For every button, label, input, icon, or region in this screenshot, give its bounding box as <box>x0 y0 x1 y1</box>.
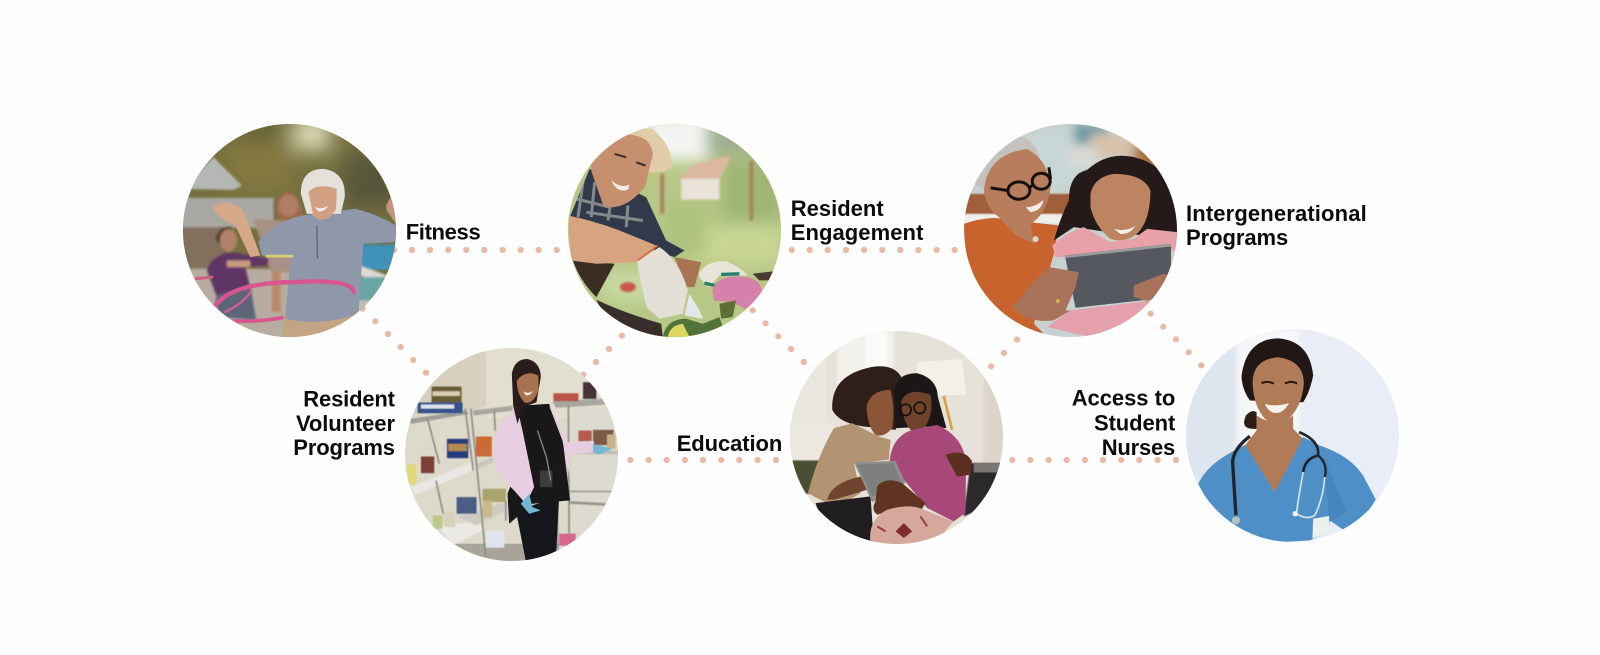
planter and flowers <box>596 270 780 336</box>
hands <box>1012 267 1172 320</box>
label: access to student nurses <box>1072 386 1176 460</box>
label: intergenerational programs: Programs <box>1186 225 1288 250</box>
volunteer woman <box>493 358 612 560</box>
clinic background <box>1183 329 1399 542</box>
label: resident volunteer programs <box>293 387 396 460</box>
right shelving with cans <box>552 382 618 547</box>
label: access to student nurses: Access to <box>1072 386 1175 411</box>
pantry walls <box>405 348 618 560</box>
tablet and hands <box>854 460 925 514</box>
floor lamp <box>914 359 966 429</box>
hula hoops <box>196 256 354 321</box>
connector: resident engagement to intergenerational <box>789 247 958 253</box>
girl with hoop <box>207 226 269 320</box>
connector: education to intergenerational <box>988 336 1020 369</box>
backyard background <box>180 117 400 340</box>
grandmother <box>964 135 1059 333</box>
connector: intergenerational to student nurses <box>1148 311 1204 368</box>
photo circle: fitness <box>183 124 396 337</box>
main woman with hoop <box>212 168 396 336</box>
label: access to student nurses: Student <box>1094 411 1176 436</box>
photo circle: intergenerational programs <box>964 124 1177 337</box>
living room background <box>790 330 1004 544</box>
patterned trousers <box>870 506 954 544</box>
label: resident engagement: Resident <box>791 196 884 221</box>
connector: volunteer to resident engagement <box>580 333 625 378</box>
garden background <box>568 114 782 336</box>
stethoscope <box>1232 432 1326 524</box>
label: fitness: Fitness <box>406 219 481 244</box>
photo circle: resident volunteer programs <box>405 348 618 561</box>
background woman <box>254 192 303 312</box>
left shelving with cans <box>407 386 512 557</box>
living room background <box>964 124 1177 336</box>
connector: education to student nurses <box>1009 457 1179 463</box>
connector: fitness to volunteer <box>360 306 429 376</box>
connector: fitness to resident engagement <box>391 247 560 253</box>
connector: volunteer to education <box>627 457 779 463</box>
label: resident engagement: Engagement <box>791 220 924 245</box>
gardener <box>568 128 701 297</box>
label: education: Education <box>677 431 782 456</box>
label: intergenerational programs <box>1186 201 1367 250</box>
girl <box>1047 155 1177 336</box>
photo circle: education <box>790 331 1003 544</box>
nurse <box>1198 338 1376 542</box>
label: intergenerational programs: Intergenerational <box>1186 201 1367 226</box>
label: resident engagement <box>791 196 924 245</box>
tablet <box>1065 243 1171 307</box>
photo circle: access to student nurses <box>1186 329 1399 542</box>
label: resident volunteer programs: Volunteer <box>296 411 395 436</box>
label: resident volunteer programs: Programs <box>293 435 395 460</box>
label: resident volunteer programs: Resident <box>303 387 396 412</box>
woman with curly hair <box>808 366 902 543</box>
label: access to student nurses: Nurses <box>1102 435 1175 460</box>
connector: resident engagement to education <box>750 307 807 365</box>
photo circle: resident engagement <box>568 124 781 337</box>
woman with braids <box>890 373 972 521</box>
gardening gloves <box>636 245 747 318</box>
